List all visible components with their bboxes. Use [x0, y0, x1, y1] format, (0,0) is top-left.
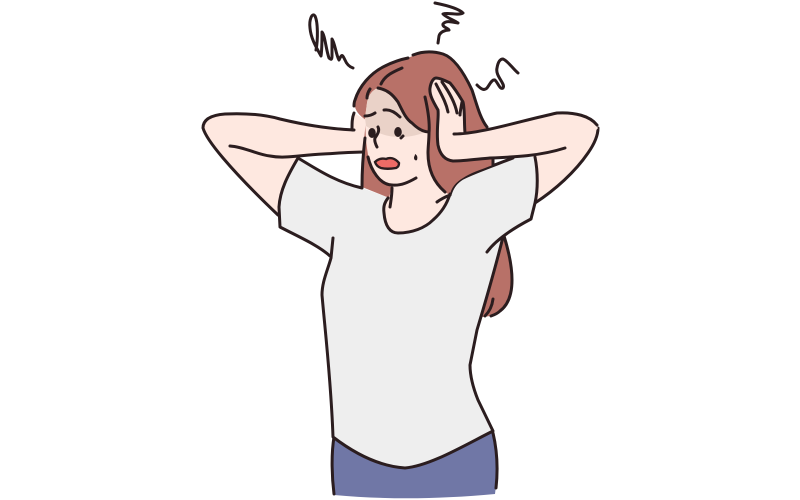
left arm: [203, 113, 366, 215]
sweat mark: [414, 154, 417, 160]
pants: [332, 431, 497, 498]
stress squiggle left: [310, 15, 353, 68]
hair mass: [354, 52, 493, 199]
t-shirt: [279, 157, 537, 468]
stress squiggle top: [435, 3, 463, 43]
hair lock line beside the face: [425, 97, 445, 192]
stress squiggle right: [477, 59, 518, 89]
back hair: long lock on the right: [480, 232, 512, 317]
neck and collar lines: [384, 188, 450, 233]
eyes: [368, 128, 376, 138]
face and neck skin: [362, 88, 450, 233]
mouth: [375, 158, 399, 169]
right arm back section: [520, 113, 598, 203]
nose: [375, 127, 379, 147]
eyebrows: [365, 110, 400, 117]
right arm and hand: [430, 78, 598, 161]
forehead shadow: [365, 88, 426, 137]
face outline and fringe line: [362, 88, 429, 187]
